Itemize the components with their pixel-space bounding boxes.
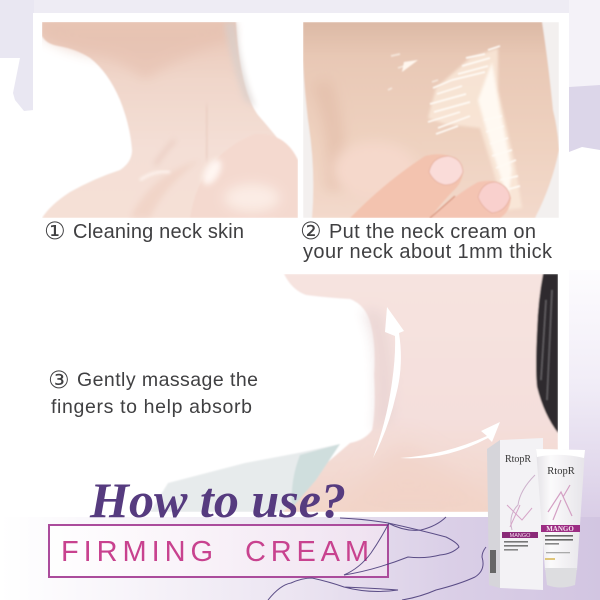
arrow: sideways massage bbox=[400, 422, 500, 458]
product: carton box bbox=[487, 438, 543, 590]
white card bbox=[33, 13, 569, 517]
step 1 caption: Cleaning neck skin bbox=[73, 221, 244, 243]
product: cream tube bbox=[536, 449, 585, 588]
panel: step 1 photo bbox=[42, 22, 298, 218]
step 2 caption bbox=[300, 217, 553, 263]
step 2 caption: Put the neck cream on bbox=[329, 221, 536, 243]
product: carton box: MANGO bbox=[510, 533, 531, 539]
product: carton box: RtopR bbox=[505, 454, 531, 465]
banner: firming cream: FIRMING bbox=[61, 536, 213, 568]
step 1 caption bbox=[44, 217, 244, 245]
banner: firming cream bbox=[49, 525, 388, 577]
step 3 caption: Gently massage the bbox=[77, 369, 258, 391]
title: How to use?: How to use? bbox=[89, 472, 346, 528]
shirt bbox=[150, 446, 328, 512]
panel: step 2 photo bbox=[303, 22, 559, 218]
product: cream tube: MANGO bbox=[546, 525, 574, 533]
arrow: upward massage bbox=[373, 307, 404, 458]
product: cream tube: RtopR bbox=[547, 466, 575, 477]
step 1 caption: ① bbox=[44, 217, 66, 245]
step 3 caption: ③ bbox=[48, 366, 70, 394]
line art flowers bbox=[268, 517, 486, 600]
step 2 caption: ② bbox=[300, 217, 322, 245]
step 3 caption: fingers to help absorb bbox=[51, 396, 252, 418]
step 2 caption: your neck about 1mm thick bbox=[303, 241, 553, 263]
cream streaks bbox=[428, 48, 522, 210]
hair bbox=[536, 274, 558, 433]
fingers bbox=[350, 154, 463, 218]
panel: step 3 photo bbox=[150, 274, 558, 512]
step 3 caption bbox=[48, 366, 258, 418]
banner: firming cream: CREAM bbox=[245, 536, 369, 568]
